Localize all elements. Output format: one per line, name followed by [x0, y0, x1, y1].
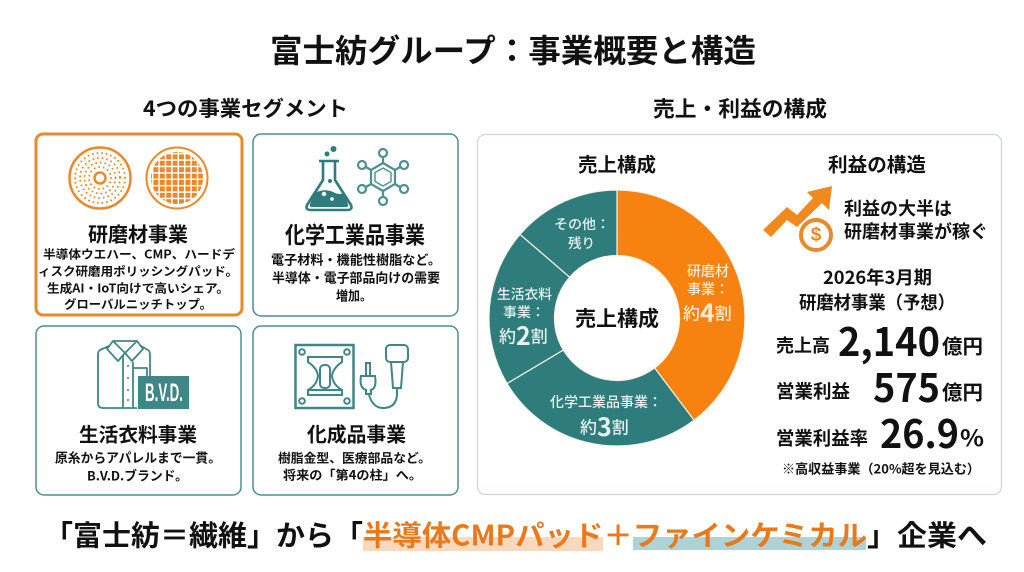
metric: sales: 億円 [942, 330, 983, 360]
heading: four business segments: 4つの事業セグメント [143, 93, 348, 123]
segment: other [520, 190, 617, 277]
icon: B.V.D. badge: B.V.D. [145, 379, 183, 407]
highlight: semiconductor [363, 537, 603, 551]
message highlighted: 半導体CMPパッド＋ファインケミカル [363, 514, 867, 554]
icon: B.V.D. badge [138, 376, 189, 409]
footnote: ※高収益事業（20%超を見込む） [782, 458, 980, 478]
forecast heading: 研磨材事業（予想） [799, 289, 955, 315]
panel: sales and profit [478, 134, 1002, 494]
metric: sales [776, 312, 983, 368]
icon: rising arrow [763, 186, 832, 237]
segment: apparel [489, 234, 570, 384]
metric: sales: 2,140 [838, 312, 940, 368]
heading: sales composition: 売上構成 [578, 148, 656, 178]
apparel description [55, 448, 221, 484]
label: abrasives share: 約4割 [683, 294, 732, 330]
label: apparel share: 約2割 [499, 317, 548, 353]
banner message [44, 514, 987, 554]
apparel description: 原糸からアパレルまで一貫。 [55, 448, 221, 466]
icon: dollar coin [801, 220, 831, 250]
message start: 「富士紡＝繊維」から「 [44, 514, 363, 554]
chemical description: 電子材料・機能性樹脂など。 [271, 250, 441, 268]
metric: operating profit: 営業利益 [776, 378, 850, 404]
chemical description: 増加。 [336, 286, 372, 304]
label: other share [554, 213, 610, 252]
abrasives description: グローバルニッチトップ。 [64, 296, 212, 312]
label: apparel share: 生活衣料 [497, 283, 553, 303]
icon: molecule [358, 149, 408, 205]
panel: apparel business [36, 326, 241, 495]
metric: sales: 売上高 [776, 332, 830, 358]
icon: medical device with plug [361, 345, 408, 408]
profit note: 研磨材事業が稼ぐ [844, 218, 988, 244]
metric: operating margin: 26.9 [880, 404, 959, 460]
abrasives description: ィスク研磨用ポリッシングパッド。 [38, 262, 238, 280]
panel: chemical products business [253, 134, 458, 316]
molded description: 将来の「第4の柱」へ。 [283, 464, 422, 484]
label: chemical share [550, 392, 662, 444]
segment: abrasives [617, 190, 745, 420]
panel: molded products business [253, 326, 458, 495]
molded description [278, 448, 431, 484]
label: abrasives share [683, 261, 732, 330]
label: chemical share: 化学工業品事業： [550, 392, 662, 412]
heading: sales and profit composition: 売上・利益の構成 [653, 92, 827, 124]
forecast heading: 2026年3月期 [823, 264, 932, 290]
segment: chemical [507, 350, 694, 446]
profit note [844, 195, 988, 244]
molded title: 化成品事業 [307, 418, 406, 448]
icon: silicon wafer [146, 148, 208, 208]
chemical description: 半導体・電子部品向けの需要 [272, 268, 440, 286]
abrasives description: 生成AI・IoT向けで高いシェア。 [47, 280, 229, 296]
chemical title: 化学工業品事業 [285, 216, 425, 250]
forecast heading [799, 264, 955, 315]
label: other share: 残り [568, 232, 595, 252]
icon: flask [306, 146, 352, 210]
abrasives title: 研磨材事業 [88, 218, 188, 248]
icon: resin mold [296, 345, 354, 408]
donut center label: 売上構成 [575, 303, 659, 333]
label: apparel share: 事業： [503, 301, 545, 321]
highlight: fine chemical [633, 537, 866, 550]
icon: polishing pad [70, 148, 130, 208]
label: apparel share [497, 283, 553, 353]
icon: dollar coin: $ [811, 224, 822, 246]
molded description: 樹脂金型、医療部品など。 [278, 448, 431, 466]
heading: profit structure: 利益の構造 [828, 148, 926, 178]
profit note: 利益の大半は [844, 195, 952, 221]
donut chart: sales composition [489, 190, 745, 446]
apparel description: B.V.D.ブランド。 [87, 466, 188, 484]
metric: operating profit: 億円 [942, 376, 983, 406]
label: abrasives share: 研磨材 [687, 261, 729, 281]
metric: operating profit [776, 358, 983, 414]
label: abrasives share: 事業： [687, 279, 729, 299]
apparel title: 生活衣料事業 [79, 418, 197, 448]
metric: operating margin [776, 404, 984, 460]
label: other share: その他： [554, 213, 610, 233]
abrasives description: 半導体ウエハー、CMP、ハードデ [43, 246, 235, 262]
metric: operating margin: % [960, 421, 984, 453]
label: chemical share: 約3割 [580, 408, 629, 444]
abrasives description [38, 246, 238, 312]
metric: operating margin: 営業利益率 [776, 425, 868, 451]
panel: abrasives business [36, 134, 242, 315]
message end: 」企業へ [867, 514, 987, 554]
icon: shirt [98, 341, 150, 408]
chemical description [271, 250, 441, 304]
metric: operating profit: 575 [873, 358, 940, 414]
title: 富士紡グループ：事業概要と構造 [270, 26, 756, 72]
